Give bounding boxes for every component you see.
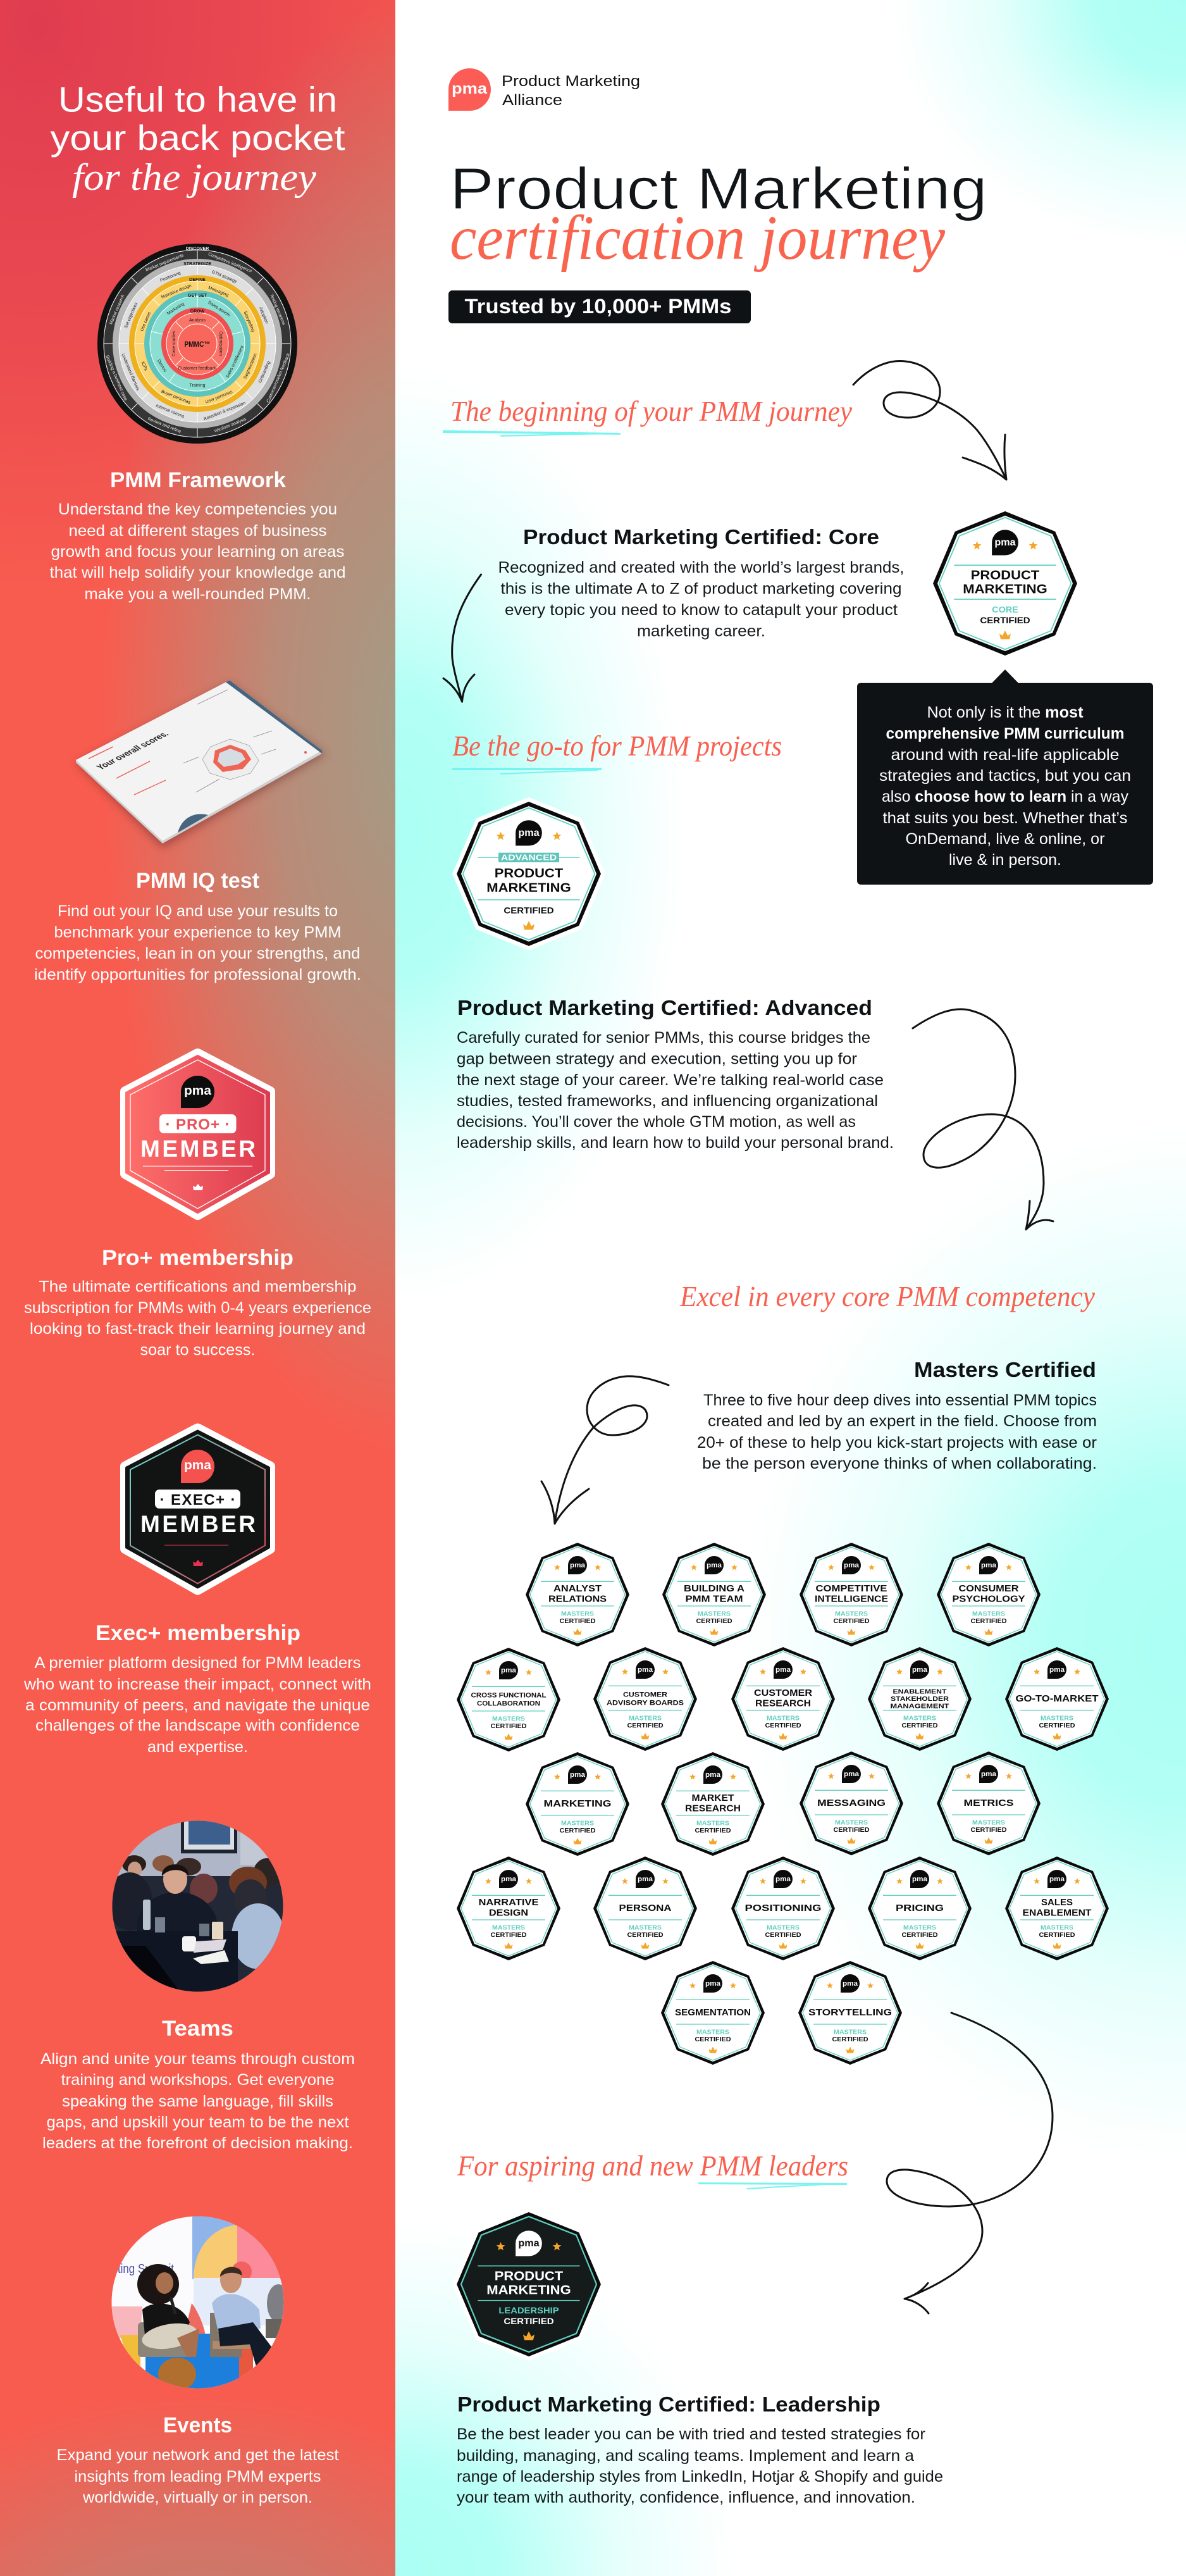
text: core description: marketing career. [637, 623, 765, 640]
badge: Market Research: pma [705, 1771, 721, 1779]
badge: Go-to-Market [1005, 1647, 1109, 1751]
badge: Building a PMM Team: MASTERS [698, 1611, 731, 1617]
badge: Sales Enablement: ENABLEMENT [1022, 1908, 1092, 1919]
text: Events description: worldwide, virtually or in person. [82, 2489, 312, 2506]
badge: Cross Functional Collaboration: CERTIFIED [490, 1723, 527, 1730]
arrow: journey start to core badge [853, 361, 1006, 480]
badge: Positioning [731, 1857, 835, 1960]
sidebar title: Useful to have in [58, 80, 337, 119]
text: Teams description: training and workshops. Get everyone [61, 2071, 334, 2089]
badge: Consumer Psychology: CONSUMER [959, 1584, 1019, 1594]
badge: Leadership certified: CERTIFIED [503, 2316, 554, 2326]
main title [450, 156, 987, 273]
chart: PMM framework wheel: Adoption [258, 307, 269, 325]
badge: Customer Research [731, 1647, 835, 1751]
text: PMM IQ test description: identify opportunities for professional growth. [34, 966, 361, 983]
badge: Enablement Stakeholder Management: STAKEHOLDER [891, 1695, 949, 1703]
text: PMM Framework description: need at different stages of business [68, 522, 326, 540]
sidebar title: for the journey [72, 156, 316, 198]
text: Teams description: leaders at the forefront of decision making. [42, 2134, 353, 2152]
text: advanced description: decisions. You’ll cover the whole GTM motion, as well as [457, 1113, 856, 1131]
badge: Customer Research: MASTERS [767, 1715, 800, 1722]
badge: Sales Enablement: MASTERS [1041, 1925, 1073, 1931]
callout: choose how to learn: around with real-life applicable [891, 746, 1120, 764]
callout: choose how to learn [857, 669, 1153, 885]
chart: PMM framework wheel: Segmentation [244, 352, 258, 380]
badge: Positioning: CERTIFIED [765, 1932, 801, 1939]
text: PMM IQ test description: Find out your IQ and use your results to [58, 902, 338, 920]
badge: Cross Functional Collaboration [457, 1648, 560, 1752]
badge: Leadership certified: MARKETING [486, 2284, 571, 2298]
chart: PMM framework wheel: Testing iterations [269, 294, 286, 326]
badge: Messaging: pma [844, 1770, 860, 1778]
text: advanced description: Carefully curated for senior PMMs, this course bridges the [457, 1029, 870, 1047]
badge: Core certified: CERTIFIED [980, 615, 1030, 625]
badge: Market Research: MARKET [692, 1793, 734, 1803]
badge: Messaging: MASTERS [835, 1820, 868, 1826]
arrow: masters to badges [541, 1376, 669, 1524]
section heading: For aspiring and new PMM leaders: For aspiring and new PMM leaders [457, 2150, 848, 2182]
badge: Customer Advisory Boards [593, 1647, 697, 1751]
text: masters description: be the person everyone thinks of when collaborating. [702, 1455, 1097, 1472]
arrow: core to advanced [443, 575, 481, 702]
badge: Customer Advisory Boards: CERTIFIED [627, 1722, 664, 1729]
section heading: Be the go-to for PMM projects [452, 730, 782, 775]
text: Events description: insights from leading PMM experts [75, 2468, 321, 2486]
logo: Product Marketing Alliance: Alliance [502, 92, 562, 109]
tag: trusted by: Trusted by 10,000+ PMMs [464, 295, 731, 318]
text: advanced description [457, 1029, 894, 1152]
badge: Narrative Design: NARRATIVE [478, 1898, 539, 1908]
badge: Segmentation: SEGMENTATION [675, 2008, 751, 2018]
text: leadership description: your team with authority, confidence, influence, and innovation. [457, 2489, 915, 2506]
badge: Pricing: CERTIFIED [901, 1932, 938, 1939]
chart: PMM framework wheel: Demos [156, 359, 168, 373]
badge: Storytelling: pma [843, 1980, 858, 1988]
heading: Teams: Teams [162, 2017, 233, 2041]
badge: Building a PMM Team: CERTIFIED [696, 1618, 732, 1625]
photo: events panel: ting Summit [118, 2262, 174, 2276]
badge: Marketing: MARKETING [543, 1799, 612, 1809]
text: PMM Framework description: that will help solidify your knowledge and [49, 564, 345, 582]
badge: Segmentation [661, 1961, 765, 2065]
photo: teams workshop [107, 1820, 285, 1993]
badge: Advanced certified: ADVANCED [501, 852, 557, 862]
chart: PMM framework wheel: User personas [205, 390, 233, 405]
text: Pro+ membership description [24, 1278, 371, 1359]
badge: Exec+ member: · EXEC+ · [159, 1491, 235, 1509]
badge: Cross Functional Collaboration: CROSS FUNCTIONAL [471, 1692, 547, 1700]
text: Exec+ membership description [23, 1654, 371, 1756]
heading: Product Marketing Certified: Leadership: Product Marketing Certified: Leadership [457, 2392, 880, 2416]
badge: Metrics: METRICS [964, 1798, 1014, 1808]
badge: Pro+ member: MEMBER [140, 1136, 256, 1162]
badge: Metrics: pma [981, 1770, 997, 1778]
badge: Persona: PERSONA [619, 1903, 672, 1913]
text: PMM IQ test description: competencies, lean in on your strengths, and [35, 945, 361, 962]
arrow: masters to leadership [887, 2013, 1053, 2313]
chart: PMM framework wheel: PMMC™ [185, 340, 210, 349]
badge: Analyst Relations [526, 1543, 629, 1646]
badge: Customer Research: CUSTOMER [754, 1688, 813, 1698]
badge: Building a PMM Team [662, 1543, 766, 1646]
badge: Messaging [800, 1752, 903, 1855]
badge: Advanced certified: CERTIFIED [503, 905, 554, 916]
badge: Messaging: MESSAGING [817, 1798, 886, 1808]
text: Exec+ membership description: A premier platform designed for PMM leaders [34, 1654, 361, 1672]
text: masters description: Three to five hour deep dives into essential PMM topics [703, 1391, 1097, 1409]
badge: Customer Advisory Boards: MASTERS [629, 1715, 662, 1722]
chart: PMM framework wheel: DEFINE [189, 278, 206, 282]
badge: Marketing: pma [570, 1771, 586, 1779]
chart: PMM framework wheel: DISCOVER [186, 247, 209, 251]
badge: Core certified [933, 511, 1077, 656]
badge: Storytelling: STORYTELLING [808, 2008, 892, 2018]
chart: PMM framework wheel: Sales enablement [225, 345, 245, 379]
text: masters description: created and led by an expert in the field. Choose from [708, 1412, 1097, 1430]
chart: PMM framework wheel: Market research [109, 294, 126, 325]
badge: Positioning: MASTERS [767, 1925, 800, 1931]
heading: Product Marketing Certified: Advanced: Product Marketing Certified: Advanced [457, 996, 872, 1019]
badge: Customer Research: RESEARCH [755, 1699, 811, 1709]
badge: Competitive Intelligence: MASTERS [835, 1611, 868, 1617]
text: Pro+ membership description: subscription for PMMs with 0-4 years experience [24, 1299, 371, 1317]
text: Pro+ membership description: The ultimate certifications and membership [39, 1278, 357, 1296]
chart: PMM framework wheel: Onboarding [258, 361, 271, 383]
badge: Narrative Design [457, 1857, 560, 1960]
chart: PMM framework wheel: GET SET [188, 294, 207, 298]
badge: Persona: MASTERS [629, 1925, 662, 1931]
heading: Pro+ membership: Pro+ membership [102, 1246, 293, 1270]
badge: Enablement Stakeholder Management: ENABLEMENT [893, 1688, 947, 1696]
chart: PMM framework wheel: Internal comms [155, 404, 185, 419]
badge: Pricing: PRICING [896, 1903, 944, 1913]
badge: Competitive Intelligence: INTELLIGENCE [815, 1595, 888, 1605]
chart: PMM framework wheel: Case studies [172, 330, 176, 356]
badge: Enablement Stakeholder Management: MASTERS [903, 1715, 936, 1722]
main title: Product Marketing [450, 156, 987, 221]
badge: Market Research: RESEARCH [685, 1804, 741, 1814]
chart: PMM framework wheel: Win/loss analysis [214, 417, 247, 434]
chart: PMM framework wheel: Marketing [166, 302, 185, 316]
text: advanced description: leadership skills, and learn how to build your personal brand. [457, 1134, 894, 1152]
badge: Exec+ member: MEMBER [140, 1511, 256, 1537]
badge: Market Research: CERTIFIED [695, 1827, 731, 1834]
badge: Leadership certified: PRODUCT [495, 2269, 564, 2283]
badge: Marketing: CERTIFIED [559, 1827, 596, 1834]
chart: PMM framework wheel: Analysis [189, 318, 206, 323]
badge: Narrative Design: DESIGN [489, 1908, 528, 1919]
heading: PMM Framework: PMM Framework [110, 468, 286, 492]
badge: Customer Research: pma [775, 1666, 791, 1674]
chart: PMM framework wheel: Use cases [140, 311, 152, 332]
badge: Leadership certified: pma [518, 2238, 540, 2249]
badge: Enablement Stakeholder Management: CERTIFIED [901, 1722, 938, 1729]
callout: choose how to learn: OnDemand, live & online, or [906, 830, 1104, 848]
chart: PMM framework wheel: ICPs [140, 361, 148, 372]
badge: Enablement Stakeholder Management: MANAGEMENT [891, 1702, 949, 1710]
badge: Marketing: MASTERS [561, 1820, 594, 1827]
text: PMM Framework description: Understand the key competencies you [58, 501, 337, 518]
badge: Pricing: MASTERS [903, 1925, 936, 1931]
badge: Go-to-Market: GO-TO-MARKET [1016, 1694, 1099, 1704]
chart: PMM framework wheel [97, 244, 297, 444]
heading: Events: Events [163, 2413, 232, 2437]
badge: Persona: pma [638, 1876, 653, 1883]
logo: Product Marketing Alliance: Product Marketing [502, 73, 640, 90]
text: Teams description: gaps, and upskill your team to be the next [47, 2113, 349, 2131]
section heading: The beginning of your PMM journey: The beginning of your PMM journey [450, 395, 853, 427]
callout: choose how to learn: that suits you best. Whether that’s [883, 809, 1127, 827]
badge: Consumer Psychology: pma [981, 1562, 997, 1569]
heading: Product Marketing Certified: Core: Product Marketing Certified: Core [523, 525, 879, 549]
text: Teams description: Align and unite your teams through custom [40, 2050, 355, 2068]
badge: Building a PMM Team: pma [707, 1562, 722, 1569]
badge: Customer Advisory Boards: CUSTOMER [623, 1691, 667, 1698]
badge: Leadership certified [452, 2208, 605, 2361]
badge: Storytelling: MASTERS [834, 2029, 867, 2036]
text: PMM IQ test description [34, 902, 361, 983]
callout: choose how to learn: also choose how to learn in a way [882, 788, 1128, 806]
badge: Advanced certified [452, 797, 605, 950]
badge: Enablement Stakeholder Management: pma [912, 1666, 928, 1674]
chart: PMM framework wheel: Optimisation [218, 332, 223, 356]
badge: Core certified: PRODUCT [971, 568, 1040, 582]
text: Events description [57, 2446, 339, 2506]
badge: Metrics [937, 1752, 1041, 1855]
text: PMM Framework description: make you a well-rounded PMM. [85, 585, 311, 603]
chart: PMM framework wheel: Customer feedback [178, 366, 217, 371]
logo: Product Marketing Alliance [448, 68, 640, 111]
badge: Narrative Design: pma [501, 1876, 517, 1883]
badge: Cross Functional Collaboration: COLLABORATION [477, 1700, 540, 1707]
badge: Competitive Intelligence [800, 1543, 903, 1646]
badge: Analyst Relations: ANALYST [553, 1584, 602, 1594]
chart: PMM framework wheel: STRATEGIZE [183, 262, 211, 266]
badge: Analyst Relations: pma [570, 1562, 586, 1569]
badge: Competitive Intelligence: COMPETITIVE [815, 1584, 887, 1594]
text: leadership description: building, managing, and scaling teams. Implement and learn a [457, 2447, 914, 2465]
text: Pro+ membership description: soar to success. [140, 1341, 256, 1359]
text: Teams description: speaking the same language, fill skills [62, 2093, 333, 2110]
chart: PMM framework wheel: Messaging [207, 285, 229, 298]
sidebar title: your back pocket [51, 118, 345, 158]
badge: Market Research [661, 1752, 765, 1856]
text: core description: every topic you need to know to catapult your product [505, 601, 898, 619]
text: Exec+ membership description: who want to increase their impact, connect with [23, 1676, 371, 1693]
badge: Market Research: MASTERS [696, 1820, 729, 1827]
badge: Narrative Design: CERTIFIED [490, 1932, 527, 1939]
badge: Metrics: CERTIFIED [970, 1827, 1007, 1834]
badge: Core certified: MARKETING [963, 583, 1047, 597]
badge: Positioning: pma [775, 1876, 791, 1883]
badge: Narrative Design: MASTERS [492, 1925, 525, 1931]
section heading: Excel in every core PMM competency: Excel in every core PMM competency [679, 1280, 1096, 1312]
chart: PMM framework wheel: GROW [190, 309, 205, 314]
text: PMM IQ test description: benchmark your experience to key PMM [54, 924, 342, 942]
badge: Consumer Psychology [937, 1543, 1041, 1646]
chart: PMM framework wheel: Narrative design [161, 283, 192, 300]
badge: Pricing: pma [912, 1876, 928, 1883]
text: leadership description [457, 2425, 943, 2506]
background: right panel [395, 0, 1186, 2576]
sidebar title [51, 80, 345, 198]
badge: Building a PMM Team: BUILDING A [684, 1584, 745, 1594]
text: masters description: 20+ of these to help you kick-start projects with ease or [697, 1434, 1097, 1452]
text: PMM Framework description: growth and focus your learning on areas [51, 543, 344, 561]
badge: Pro+ member: pma [184, 1084, 212, 1098]
badge: Go-to-Market: CERTIFIED [1039, 1722, 1075, 1729]
logo: Product Marketing Alliance: pma [452, 80, 488, 97]
badge: Pro+ member: · PRO+ · [166, 1116, 230, 1133]
photo: events panel [111, 2216, 290, 2391]
chart: PMM framework wheel: Review and refine [147, 417, 182, 434]
chart: PMM framework wheel: Buyer personas [161, 389, 191, 405]
badge: Storytelling: CERTIFIED [832, 2036, 868, 2043]
badge: Sales Enablement: SALES [1041, 1898, 1073, 1908]
text: Exec+ membership description: and expertise. [147, 1738, 248, 1756]
chart: PMM framework wheel: GTM strategy [211, 270, 238, 284]
chart: PMM framework wheel: Competitive intelligence [207, 252, 252, 274]
text: core description [498, 559, 905, 640]
badge: Customer Advisory Boards: pma [638, 1666, 653, 1674]
chart: PMM framework wheel: Sales assets [207, 301, 231, 318]
badge: Persona: CERTIFIED [627, 1932, 664, 1939]
chart: PMM framework wheel: Training [189, 383, 206, 388]
badge: Exec+ member: pma [184, 1459, 212, 1472]
badge: Enablement Stakeholder Management [868, 1647, 972, 1751]
text: Pro+ membership description: looking to fast-track their learning journey and [30, 1320, 366, 1338]
text: core description: Recognized and created with the world’s largest brands, [498, 559, 905, 576]
callout: choose how to learn: Not only is it the most [927, 704, 1084, 721]
badge: Consumer Psychology: MASTERS [972, 1611, 1005, 1617]
badge: Cross Functional Collaboration: pma [501, 1667, 517, 1674]
badge: Segmentation: pma [705, 1980, 721, 1988]
badge: Segmentation: MASTERS [696, 2029, 729, 2036]
text: Exec+ membership description: challenges of the landscape with confidence [35, 1717, 360, 1734]
badge: Cross Functional Collaboration: MASTERS [492, 1716, 525, 1722]
heading: Exec+ membership: Exec+ membership [96, 1621, 300, 1645]
chart: PMM framework wheel: Retention & expansion [203, 401, 246, 422]
panel: sidebar background [0, 0, 395, 2576]
text: Exec+ membership description: a community of peers, and navigate the unique [25, 1696, 370, 1714]
chart: PMM framework wheel: Market requirements [145, 253, 185, 273]
badge: Messaging: CERTIFIED [833, 1827, 870, 1834]
badge: Advanced certified: PRODUCT [495, 867, 564, 881]
badge: Advanced certified: MARKETING [486, 881, 571, 895]
badge: Consumer Psychology: CERTIFIED [970, 1618, 1007, 1625]
badge: Customer Research: CERTIFIED [765, 1722, 801, 1729]
callout: choose how to learn: comprehensive PMM curriculum [886, 725, 1125, 743]
main title: certification journey [450, 202, 946, 273]
text: Events description: Expand your network and get the latest [57, 2446, 339, 2464]
badge: Analyst Relations: MASTERS [561, 1611, 594, 1617]
badge: Go-to-Market: pma [1049, 1666, 1065, 1674]
icon: PMM IQ test report: Your overall scores. [95, 730, 171, 771]
badge: Building a PMM Team: PMM TEAM [686, 1595, 743, 1605]
badge: Sales Enablement: pma [1049, 1876, 1065, 1883]
badge: Sales Enablement: CERTIFIED [1039, 1932, 1075, 1939]
badge: Sales Enablement [1005, 1857, 1109, 1960]
text: advanced description: studies, tested frameworks, and influencing organizational [457, 1092, 878, 1110]
chart: PMM framework wheel: Storytelling [242, 311, 255, 333]
badge: Pro+ member [125, 1054, 270, 1215]
badge: Consumer Psychology: PSYCHOLOGY [953, 1595, 1025, 1605]
badge: Advanced certified: pma [518, 828, 540, 838]
heading: PMM IQ test: PMM IQ test [136, 869, 259, 893]
badge: Core certified: pma [994, 537, 1016, 548]
callout: choose how to learn: live & in person. [949, 851, 1061, 869]
badge: Leadership certified: LEADERSHIP [498, 2305, 559, 2315]
badge: Positioning: POSITIONING [745, 1903, 821, 1913]
badge: Analyst Relations: RELATIONS [548, 1595, 607, 1605]
badge: Competitive Intelligence: CERTIFIED [833, 1618, 870, 1625]
text: leadership description: range of leadership styles from LinkedIn, Hotjar & Shopify and guide [457, 2468, 943, 2486]
chart: PMM framework wheel: Positioning [159, 271, 182, 283]
text: advanced description: gap between strategy and execution, setting you up for [457, 1050, 857, 1068]
badge: Marketing [526, 1752, 629, 1856]
badge: Exec+ member [125, 1429, 270, 1590]
badge: Metrics: MASTERS [972, 1820, 1005, 1826]
badge: Segmentation: CERTIFIED [695, 2036, 731, 2043]
badge: Competitive Intelligence: pma [844, 1562, 860, 1569]
badge: Customer Advisory Boards: ADVISORY BOARDS [607, 1700, 684, 1707]
badge: Core certified: CORE [992, 604, 1018, 614]
chart: PMM framework wheel: Set objectives [124, 302, 139, 329]
text: PMM Framework description [49, 501, 345, 603]
chart: PMM framework wheel: Understand Barriers [120, 353, 140, 392]
text: leadership description: Be the best leader you can be with tried and tested strategies for [457, 2425, 925, 2443]
badge: Storytelling [798, 1961, 902, 2065]
badge: Go-to-Market: MASTERS [1041, 1715, 1073, 1722]
arrow: advanced to masters [913, 1009, 1053, 1229]
chart: PMM framework wheel: Building a business case [104, 355, 128, 401]
tag: trusted by [448, 290, 751, 323]
callout: choose how to learn: strategies and tactics, but you can [879, 767, 1131, 785]
text: core description: this is the ultimate A to Z of product marketing covering [501, 580, 902, 597]
heading: Masters Certified: Masters Certified [914, 1358, 1096, 1381]
text: advanced description: the next stage of your career. We’re talking real-world case [457, 1071, 884, 1089]
badge: Analyst Relations: CERTIFIED [559, 1618, 596, 1625]
text: Teams description [40, 2050, 355, 2152]
chart: PMM framework wheel: Customer/market feedback [266, 352, 291, 404]
icon: PMM IQ test report [76, 680, 326, 848]
badge: Persona [593, 1857, 697, 1960]
section heading: Be the go-to for PMM projects: Be the go-to for PMM projects [452, 730, 782, 762]
text: masters description [697, 1391, 1097, 1472]
badge: Pricing [868, 1857, 972, 1960]
